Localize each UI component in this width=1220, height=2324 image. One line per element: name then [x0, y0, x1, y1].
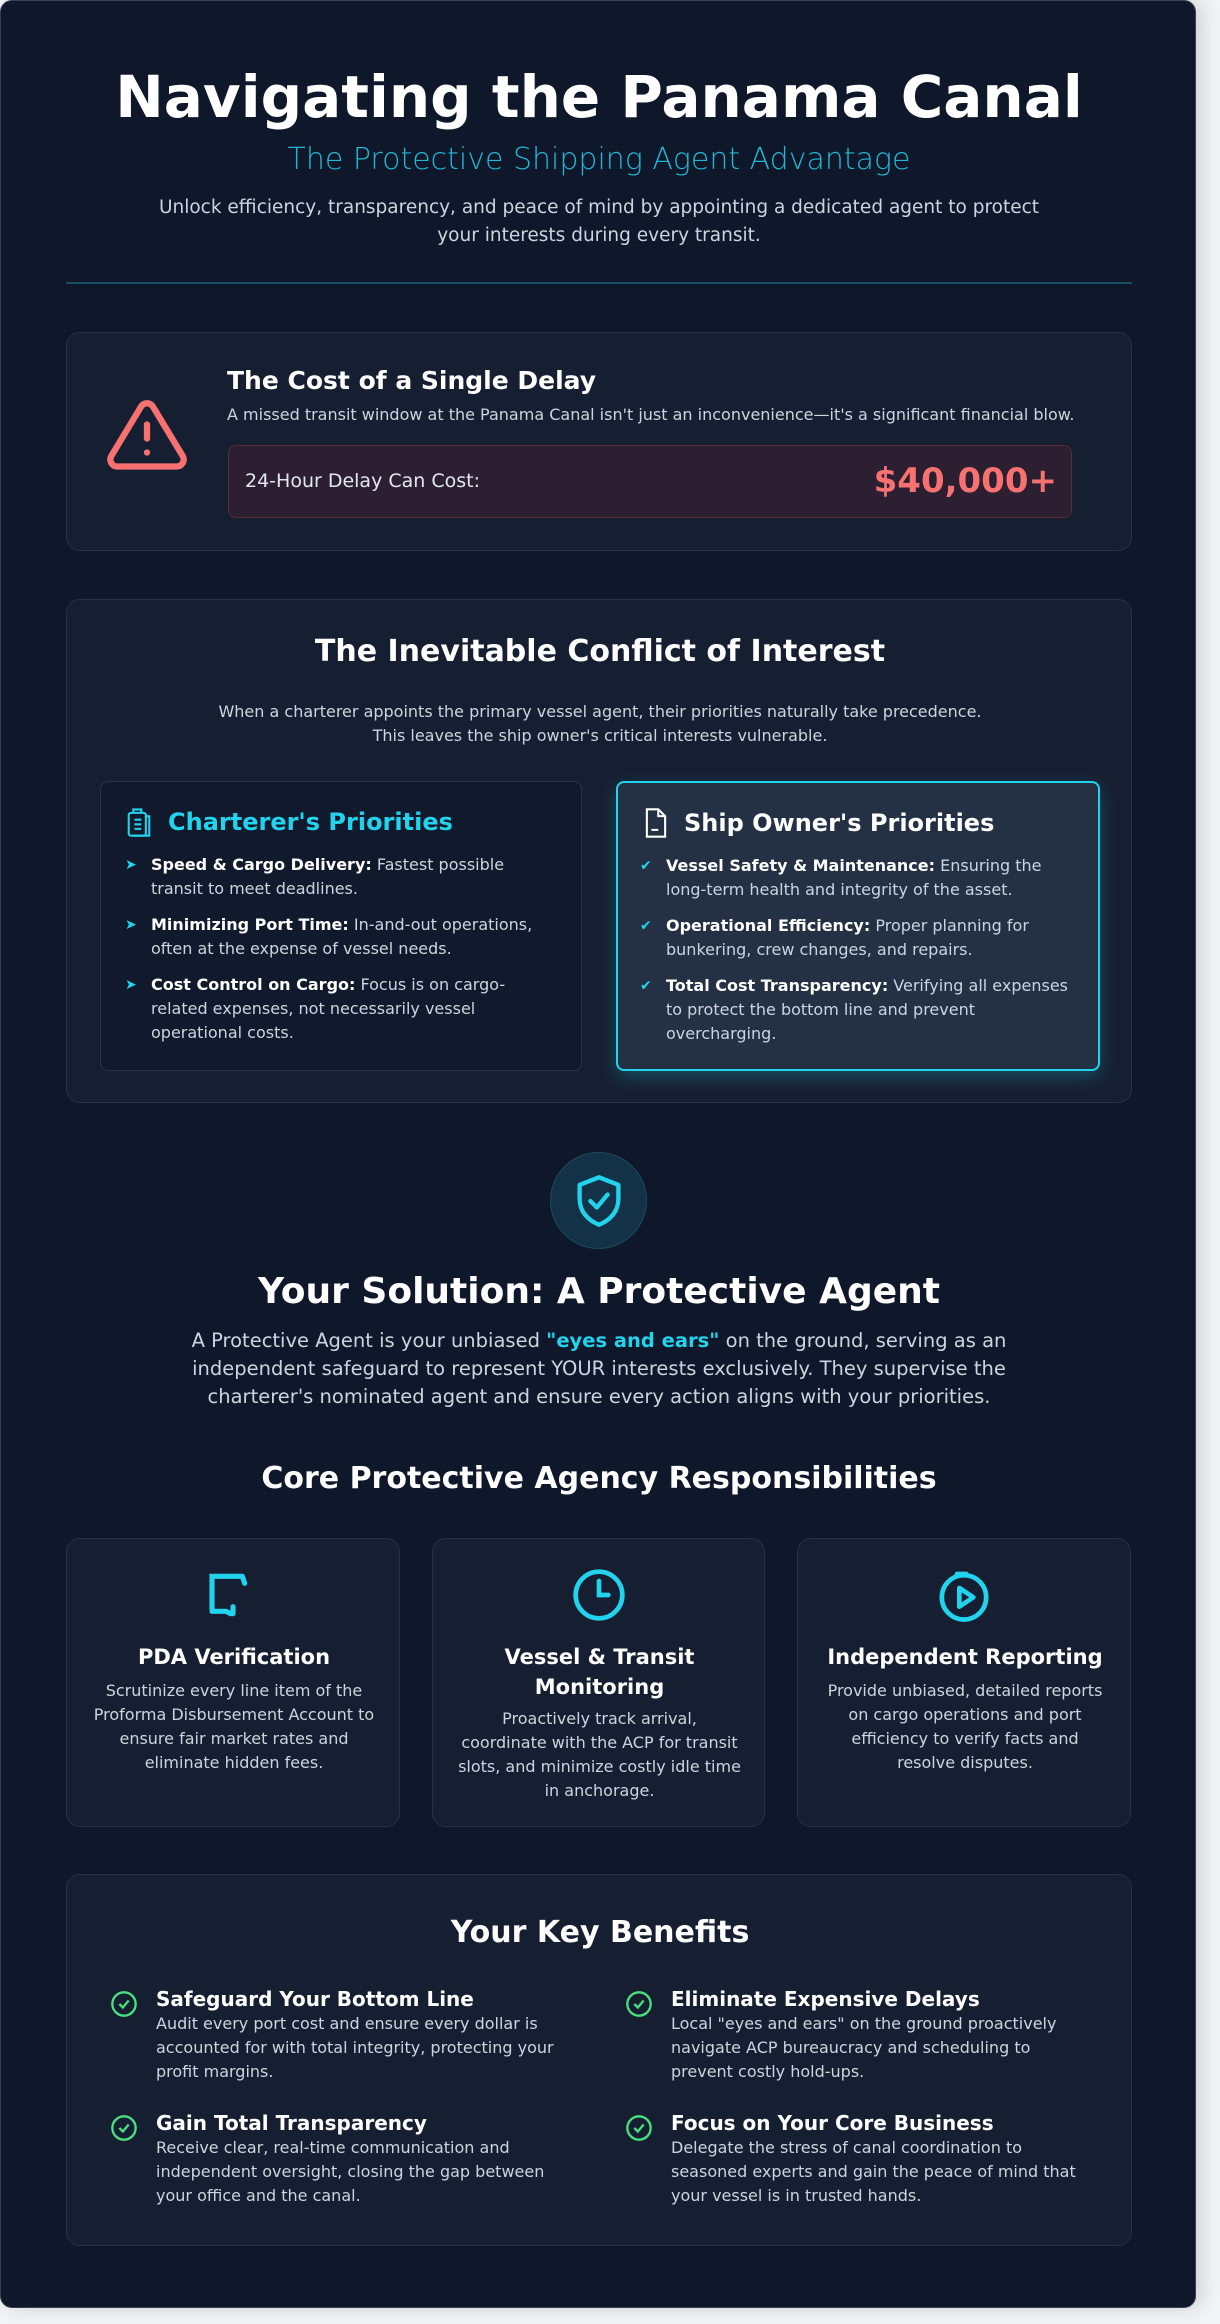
- callout: cost: 24-Hour Delay Can Cost:: [245, 470, 480, 492]
- heading: The Inevitable Conflict of Interest: [315, 634, 885, 669]
- card: reporting: Provide unbiased, detailed reports on cargo operations and port efficiency to verify facts and resolve disputes.: [828, 1681, 1102, 1772]
- panel: ship owner: ✔: [640, 858, 652, 874]
- text: [218, 702, 982, 745]
- benefit 3: [111, 2111, 544, 2205]
- panel: ship owner: [616, 781, 1100, 1071]
- callout: cost: [228, 445, 1072, 518]
- icon: invoice: [209, 1574, 248, 1616]
- panel: charterer: Speed & Cargo Delivery: Fastest possible transit to meet deadlines.: [151, 855, 504, 898]
- icon: clipboard: [128, 808, 150, 837]
- heading: solution: Your Solution: A Protective Agent: [258, 1271, 940, 1312]
- card: monitoring: [432, 1538, 765, 1827]
- benefit 1: Safeguard Your Bottom Line: [156, 1987, 474, 2011]
- panel: charterer: Cost Control on Cargo: Focus is on cargo-related expenses, not necessarily vessel operational costs.: [151, 975, 505, 1042]
- panel: charterer: Minimizing Port Time: In-and-out operations, often at the expense of vessel needs.: [151, 915, 532, 958]
- icon: warning: [107, 400, 187, 470]
- card: monitoring: Vessel & Transit: [505, 1645, 694, 1669]
- card: PDA: Scrutinize every line item of the Proforma Disbursement Account to ensure fair market rates and eliminate hidden fees.: [94, 1681, 374, 1772]
- panel: conflict of interest: [66, 599, 1132, 1103]
- heading: Ship Owner's Priorities: [684, 809, 994, 837]
- benefit 1: [111, 1987, 554, 2081]
- panel: ship owner: Operational Efficiency: Proper planning for bunkering, crew changes, and repairs.: [666, 916, 1029, 959]
- benefit 1: Audit every port cost and ensure every dollar is accounted for with total integrity, protecting your profit margins.: [156, 2014, 554, 2081]
- card: PDA: PDA Verification: [138, 1645, 330, 1669]
- icon: report: [940, 1572, 988, 1622]
- panel: ship owner: Vessel Safety & Maintenance: Ensuring the long-term health and integrity of the asset.: [666, 856, 1042, 899]
- subtitle: The Protective Shipping Agent Advantage: [288, 142, 910, 177]
- text: When a charterer appoints the primary vessel agent, their priorities naturally take precedence.: [218, 702, 982, 721]
- benefit 4: Delegate the stress of canal coordination to seasoned experts and gain the peace of mind that your vessel is in trusted hands.: [671, 2138, 1076, 2205]
- title: Navigating the Panama Canal: [115, 63, 1083, 131]
- benefit 4: Focus on Your Core Business: [671, 2111, 994, 2135]
- heading: Your Key Benefits: [451, 1915, 749, 1950]
- panel: charterer: [100, 781, 582, 1071]
- text: solution: A Protective Agent is your unbiased "eyes and ears" on the ground, serving as an independent safeguard to represent YOUR interests exclusively. They supervise the charterer's nominated agent and ensure every action aligns with your priorities.: [192, 1329, 1006, 1408]
- icon: document: [646, 808, 666, 838]
- benefit 4: [626, 2111, 1076, 2205]
- text: A missed transit window at the Panama Canal isn't just an inconvenience—it's a significant financial blow.: [227, 405, 1074, 424]
- icon: clock: [573, 1569, 625, 1621]
- benefit 3: Receive clear, real-time communication and independent oversight, closing the gap between your office and the canal.: [156, 2138, 544, 2205]
- panel: charterer: ➤: [125, 857, 137, 873]
- icon: shield: [550, 1152, 647, 1249]
- intro text: Unlock efficiency, transparency, and peace of mind by appointing a dedicated agent to protect your interests during every transit.: [159, 197, 1039, 246]
- benefit 2: [626, 1987, 1056, 2081]
- card: monitoring: Proactively track arrival, coordinate with the ACP for transit slots, and minimize costly idle time in anchorage.: [458, 1709, 741, 1800]
- panel: key benefits: [66, 1874, 1132, 2246]
- benefit 3: Gain Total Transparency: [156, 2111, 427, 2135]
- panel: charterer: ➤: [125, 917, 137, 933]
- card: reporting: Independent Reporting: [827, 1645, 1103, 1669]
- benefit 2: Eliminate Expensive Delays: [671, 1987, 980, 2011]
- panel: cost of delay: [66, 332, 1132, 551]
- heading: Charterer's Priorities: [168, 808, 453, 836]
- heading: responsibilities: Core Protective Agency Responsibilities: [261, 1461, 937, 1496]
- panel: ship owner: ✔: [640, 918, 652, 934]
- panel: charterer: ➤: [125, 977, 137, 993]
- callout: cost: $40,000+: [874, 461, 1057, 501]
- text: This leaves the ship owner's critical interests vulnerable.: [373, 726, 827, 745]
- heading: The Cost of a Single Delay: [227, 366, 596, 395]
- card: monitoring: Monitoring: [535, 1675, 664, 1699]
- card: PDA: [66, 1538, 400, 1827]
- panel: ship owner: Total Cost Transparency: Verifying all expenses to protect the bottom line and prevent overcharging.: [666, 976, 1068, 1043]
- benefit 2: Local "eyes and ears" on the ground proactively navigate ACP bureaucracy and scheduling to prevent costly hold-ups.: [671, 2014, 1056, 2081]
- panel: ship owner: ✔: [640, 978, 652, 994]
- card: reporting: [797, 1538, 1131, 1827]
